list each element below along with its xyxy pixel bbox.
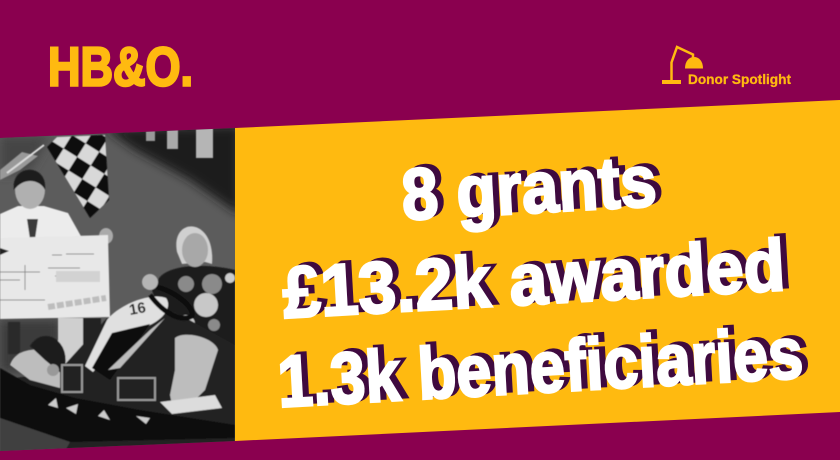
stat: 8 grants: 8 grants <box>399 141 658 236</box>
stat: £13.2k awarded: £13.2k awarded <box>286 222 793 331</box>
label: Donor Spotlight: Donor Spotlight <box>688 71 791 87</box>
man <box>0 145 113 244</box>
front wheel <box>10 350 60 388</box>
steering wheel <box>145 286 192 318</box>
giant cheque <box>0 235 110 319</box>
stats headline <box>275 138 811 423</box>
front bumper <box>0 368 235 442</box>
yellow stats panel <box>235 100 840 441</box>
go-kart: 16 <box>128 299 147 319</box>
donor spotlight badge <box>662 47 791 87</box>
photo: people with go-kart and giant cheque <box>0 120 240 460</box>
barrier lights <box>146 129 155 141</box>
go-kart <box>0 274 235 460</box>
stat: £13.2k awarded: £13.2k awarded <box>280 225 787 334</box>
checkered flag <box>47 135 109 218</box>
woman <box>150 226 235 352</box>
track background <box>0 120 235 455</box>
logo: HB&O.: HB&O. <box>48 36 193 98</box>
icon: desk lamp <box>662 47 703 84</box>
legs behind cheque <box>8 317 102 364</box>
driver legs <box>170 335 218 405</box>
stat: 8 grants: 8 grants <box>405 138 664 233</box>
